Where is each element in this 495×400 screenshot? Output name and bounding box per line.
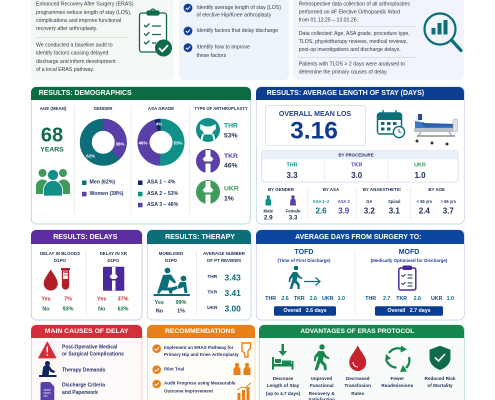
column: age <box>36 106 70 196</box>
heading: advantages: ADVANTAGES OF ERAS PROTOCOL <box>300 328 414 335</box>
column: delay in bloods: Yes <box>41 297 51 303</box>
heading: therapy: RESULTS: THERAPY <box>165 234 235 241</box>
column: type of arthroplasty: 46% <box>224 162 238 170</box>
heading: recommendations: RECOMMENDATIONS <box>165 328 235 335</box>
breakdown: by anaesthetic: BY ANAESTHETIC <box>363 187 402 192</box>
breakdown: by age: < 65 yrs <box>417 199 433 204</box>
column: age: 68 <box>41 124 63 146</box>
breakdown: by anaesthetic: GA <box>366 199 372 204</box>
text: methods: from 01.12.25 – 13.01.26. <box>299 18 358 24</box>
column: delay in XR: D1PO <box>107 258 120 263</box>
advantage: fewer readmissions: Fewer <box>391 376 404 381</box>
column: mobilised: D1PO <box>165 258 178 263</box>
table: by procedure: TKR <box>351 163 362 169</box>
breakdown: by age: 2.4 <box>419 206 430 216</box>
text: recommendations list: Implement an ERAS Pathway for <box>164 345 234 350</box>
icon: knee green <box>196 180 220 204</box>
text: introduction first paragraph: Enhanced Recovery After Surgery (ERAS) <box>36 2 134 8</box>
panel: methods <box>293 0 464 80</box>
column: MOFD: 2.6 <box>414 296 421 302</box>
text: complications: Post-Operative Medical <box>62 344 118 350</box>
text: discharge criteria: and Paperwork <box>62 390 98 396</box>
breakdown: by age <box>417 187 457 216</box>
column: mobilised: No <box>156 309 164 315</box>
column: TOFD: 2.6 <box>310 296 317 302</box>
column: mobilised: MOBILISED <box>159 251 183 256</box>
column: type of arthroplasty: 53% <box>224 132 238 140</box>
text: recommendations list: Audit Progress using Measurable <box>164 380 236 386</box>
column: ASA grade donut: 4% <box>156 122 162 126</box>
column: ASA grade donut: 46% <box>139 140 147 146</box>
column: gender donut <box>82 106 124 197</box>
column: mobilised: 99% <box>176 300 187 306</box>
legend: gender: Women (38%) <box>90 191 124 197</box>
column: PT reviews: 3.41 <box>225 288 241 298</box>
column: age: AGE (MEAN) <box>40 106 67 111</box>
text: discharge criteria: Discharge Criteria <box>62 383 105 389</box>
panel: results delays <box>31 230 142 320</box>
heading: length of stay: RESULTS: AVERAGE LENGTH OF STAY (DAYS) <box>267 90 424 97</box>
text: objectives list: of elective Hip/Knee arthroplasty <box>196 13 272 19</box>
table: by procedure: THR <box>286 163 298 169</box>
breakdown: by anaesthetic <box>363 187 402 216</box>
icon: magnifying glass with chart <box>424 14 461 50</box>
column: TOFD: TOFD <box>295 249 313 256</box>
column: delay in bloods: 7% <box>64 297 72 303</box>
column: PT reviews: UKR <box>207 305 218 311</box>
column: type of arthroplasty: UKR <box>224 186 239 192</box>
column: delay in XR: 63% <box>118 306 129 312</box>
column: TOFD: UKR <box>322 296 334 302</box>
icon: x-ray knee <box>103 267 124 291</box>
text: methods: Retrospective data collection of all arthroplasties <box>299 2 410 8</box>
column: TOFD: (Time of First Discharge) <box>278 258 331 263</box>
icon: purple clipboard <box>399 266 416 290</box>
icon: people group <box>36 169 70 196</box>
legend: ASA grade: ASA 1 – 4% <box>147 180 176 186</box>
breakdown: by ASA: ASA 3 <box>338 199 350 204</box>
panel: recommendations <box>147 325 255 400</box>
column: TOFD: TKR <box>294 296 305 302</box>
text: recommendations list: Primary Hip and Knee Arthroplasty <box>164 352 239 357</box>
column: mobilised: 1% <box>177 309 185 315</box>
heading: causes: MAIN CAUSES OF DELAY <box>45 328 129 335</box>
advantage: improved functional recovery: Improved <box>311 376 332 381</box>
text: recommendations list: Pilot Trial <box>164 366 184 372</box>
icon: calendar with clock <box>378 110 405 138</box>
icon: warning triangle <box>39 342 56 358</box>
advantage: decreased transfusion rates: Transfusion <box>344 383 371 388</box>
column: MOFD: 1.0 <box>447 296 454 302</box>
text: discharge criteria <box>62 383 105 396</box>
icon: physiotherapist with patient <box>154 268 190 296</box>
column: TOFD: 2.6 <box>281 296 289 302</box>
legend: ASA grade: ASA 3 – 46% <box>147 202 179 208</box>
text: introduction first paragraph: programmes reduce length of stay (LOS), <box>36 10 131 16</box>
breakdown: by gender: Male <box>264 208 274 214</box>
advantage: decreased transfusion rates <box>344 346 371 396</box>
heading: demographics: RESULTS: DEMOGRAPHICS <box>39 90 132 97</box>
panel: objectives <box>179 0 289 80</box>
table: by procedure: UKR <box>414 163 426 169</box>
text: methods: Patients with TLOS > 2 days were analysed to <box>299 61 405 67</box>
column: delay in bloods: No <box>42 306 50 312</box>
column: PT reviews <box>203 251 246 314</box>
column: ASA grade donut: ASA GRADE <box>148 106 174 111</box>
advantage: decreased transfusion rates: Rates <box>351 391 364 396</box>
breakdown: by gender: 2.9 <box>264 214 273 222</box>
icon: knee purple <box>196 149 220 173</box>
legend: ASA grade <box>138 180 179 208</box>
column: PT reviews: OF PT REVIEWS <box>207 258 241 263</box>
icon: orange check bullets <box>152 344 161 388</box>
column: TOFD <box>265 249 345 316</box>
breakdown: by ASA: BY ASA <box>323 187 340 192</box>
advantage: fewer readmissions <box>381 346 414 388</box>
icon: hip <box>196 118 220 142</box>
table: by procedure: 3.3 <box>286 171 298 180</box>
icon: clipboard with check <box>140 9 172 56</box>
column: delay in XR <box>97 251 129 312</box>
panel: main causes of delay <box>31 325 142 400</box>
text: objectives list: Identify average length of stay (LOS) <box>196 5 281 11</box>
text: introduction first paragraph: recovery after arthroplasty. <box>36 26 97 32</box>
icon: orange hip <box>242 343 250 357</box>
breakdown: by anaesthetic: 3.2 <box>364 206 375 216</box>
column: delay in bloods <box>40 251 80 312</box>
advantage: decrease length of stay: Length of Stay <box>267 383 300 388</box>
table: by procedure <box>262 151 458 182</box>
text: objectives list: these factors <box>196 53 227 59</box>
breakdown: by ASA: ASA 1–2 <box>313 199 330 204</box>
column: delay in XR: DELAY IN XR <box>100 251 128 256</box>
breakdown: by ASA: 2.6 <box>315 206 327 216</box>
table: by procedure: 1.0 <box>414 171 426 180</box>
text: introduction second paragraph: identify factors causing delayed <box>36 51 108 57</box>
legend: ASA grade: ASA 2 – 53% <box>147 191 179 197</box>
text: objectives list: Identify how to improve <box>196 45 250 51</box>
column: type of arthroplasty: TYPE OF ARTHROPLASTY <box>194 106 248 111</box>
column: delay in XR: Yes <box>97 297 106 303</box>
icon: orange people <box>234 363 250 375</box>
breakdown: by gender: BY GENDER <box>268 187 295 192</box>
advantage: decrease length of stay: Decrease <box>273 376 294 381</box>
text: introduction second paragraph <box>36 42 116 73</box>
advantage: decrease length of stay <box>266 344 301 396</box>
column: MOFD: (Medically Optimised for Discharge) <box>371 258 448 263</box>
text: methods: performed on 4F Elective Orthopaedic Ward <box>299 10 400 16</box>
panel: results demographics <box>31 87 251 224</box>
column: TOFD: THR <box>265 296 276 302</box>
breakdown: by ASA: 3.9 <box>338 206 350 216</box>
text: complications: or Surgical Complications <box>62 352 124 358</box>
card: overall mean LOS: 3.16 <box>290 118 338 144</box>
text: introduction second paragraph: We conducted a baseline audit to <box>36 42 113 48</box>
column: PT reviews: AVERAGE NUMBER <box>203 251 246 256</box>
column: type of arthroplasty <box>194 106 248 204</box>
card: overall mean LOS: OVERALL MEAN LOS <box>279 111 351 118</box>
icon: blood drop and tube <box>44 268 70 290</box>
advantage: improved functional recovery: Functional <box>310 383 334 388</box>
column: gender donut: 62% <box>86 154 95 158</box>
column: ASA grade donut: 53% <box>174 140 182 146</box>
panel: results therapy <box>147 230 251 320</box>
column: delay in XR: 37% <box>118 297 129 303</box>
panel: introduction <box>31 0 174 80</box>
legend: gender <box>82 180 124 197</box>
column: mobilised: Yes <box>155 300 164 306</box>
column: PT reviews: TKR <box>207 290 218 296</box>
column: age: YEARS <box>40 146 64 154</box>
text: methods: determine the primary causes of delay. <box>299 69 388 75</box>
advantage: decrease length of stay: (up to 4.7 days) <box>266 391 301 396</box>
column: type of arthroplasty: 1% <box>224 196 234 202</box>
text: recommendations list <box>164 345 239 394</box>
icon: document <box>40 382 54 400</box>
breakdown: by anaesthetic: 3.1 <box>389 206 400 216</box>
advantage: reduced risk of mortality: of Mortality <box>427 383 453 388</box>
column: MOFD: THR <box>365 296 376 302</box>
icon: walking person with arrow <box>289 266 320 289</box>
icon: check bullets <box>184 4 192 52</box>
text: methods: TLOS, physiotherapy reviews, medical reviews, <box>299 39 408 45</box>
column: MOFD <box>365 249 454 316</box>
column: ASA grade donut <box>138 106 182 208</box>
pill: overall MOFD: Overall 2.7 days <box>387 308 431 314</box>
advantage: decreased transfusion rates: Decreased <box>346 376 370 381</box>
column: type of arthroplasty: TKR <box>224 153 238 160</box>
text: introduction second paragraph: discharge and inform development <box>36 59 116 65</box>
column: PT reviews: 3.00 <box>225 304 241 314</box>
breakdown: by age: 3.7 <box>443 206 454 216</box>
breakdown: by gender <box>264 187 301 222</box>
advantage: improved functional recovery: Recovery & <box>309 391 335 396</box>
column: gender donut: 38% <box>116 142 124 146</box>
card: overall mean LOS <box>265 106 366 146</box>
panel: results average length of stay <box>256 87 464 224</box>
icon: growth chart <box>237 383 251 400</box>
text: methods: post-op investigations and discharge delays. <box>299 47 401 53</box>
table: by procedure: 3.0 <box>351 171 363 180</box>
text: objectives list: Identify factors that delay discharge <box>196 28 278 34</box>
column: MOFD: UKR <box>431 296 443 302</box>
column: delay in bloods: DELAY IN BLOODS <box>40 251 80 256</box>
column: PT reviews: 3.43 <box>225 273 241 283</box>
text: therapy demands: Therapy Demands <box>62 367 106 373</box>
heading: delays: RESULTS: DELAYS <box>53 234 118 241</box>
panel: average days from surgery <box>256 230 464 320</box>
column: type of arthroplasty: THR <box>224 122 238 130</box>
column: delay in XR: No <box>98 306 106 312</box>
pill: overall TOFD: Overall 2.6 days <box>283 308 327 314</box>
text: introduction first paragraph <box>36 2 134 32</box>
text: introduction second paragraph: of a local ERAS pathway. <box>36 67 94 73</box>
breakdown: by gender: 3.3 <box>289 214 298 222</box>
legend: gender: Men (62%) <box>90 180 115 186</box>
column: MOFD: TKR <box>396 296 407 302</box>
column: delay in bloods: 93% <box>63 306 74 312</box>
icon: hospital bed <box>414 114 458 146</box>
column: MOFD: MOFD <box>399 249 419 256</box>
text: recommendations list: Outcome Improvement <box>164 388 214 394</box>
advantage: reduced risk of mortality: Reduced Risk <box>424 376 456 381</box>
column: mobilised <box>154 251 190 315</box>
advantage: reduced risk of mortality <box>424 346 456 388</box>
breakdown: by ASA <box>313 187 350 216</box>
panel: advantages of ERAS protocol <box>259 325 464 400</box>
advantage: improved functional recovery <box>308 344 335 400</box>
text: methods: Data collected: Age, ASA grade, procedure type, <box>299 31 410 37</box>
column: PT reviews: THR <box>207 274 218 280</box>
column: TOFD: 1.0 <box>338 296 345 302</box>
text: introduction first paragraph: complications and improve functional <box>36 18 121 24</box>
advantage: fewer readmissions: Readmissions <box>381 383 414 388</box>
breakdown: by age: > 65 yrs <box>441 199 457 204</box>
breakdown: by anaesthetic: Spinal <box>388 199 400 204</box>
breakdown: by gender: Female <box>286 208 301 214</box>
column: MOFD: 2.7 <box>383 296 390 302</box>
text: methods <box>298 2 416 75</box>
table: by procedure: BY PROCEDURE <box>338 152 374 158</box>
text: complications <box>62 344 124 358</box>
heading: average days: AVERAGE DAYS FROM SURGERY TO: <box>295 234 421 241</box>
breakdown: by age: BY AGE <box>428 187 445 192</box>
text: objectives list <box>196 5 281 59</box>
column: gender donut: GENDER <box>94 106 113 111</box>
icon: therapy <box>39 361 56 377</box>
column: delay in bloods: D1PO <box>54 258 67 263</box>
